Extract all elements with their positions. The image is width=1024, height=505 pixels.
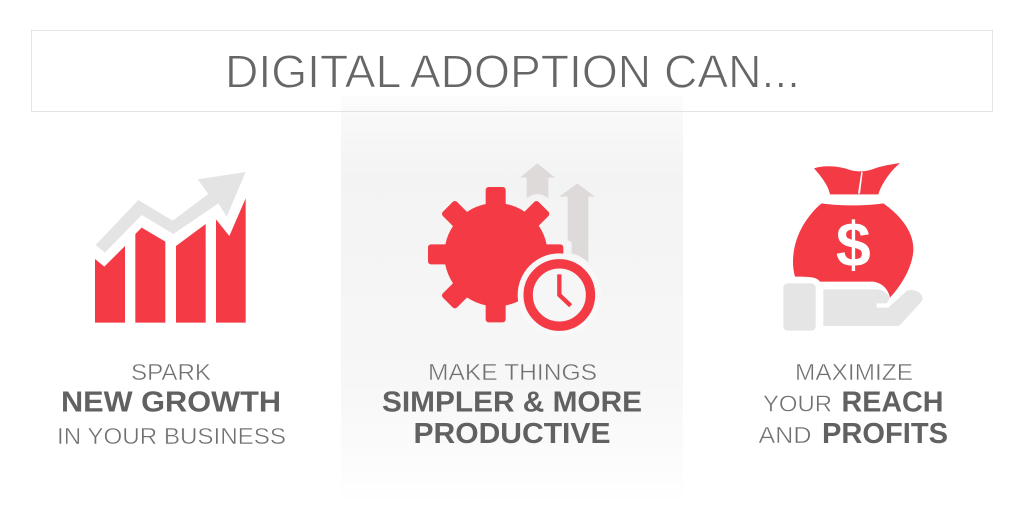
icon: rising bar chart with arrow xyxy=(95,172,246,323)
text: maximize your reach and profits: PROFITS xyxy=(822,418,948,450)
text: spark new growth: SPARK xyxy=(131,359,212,385)
text: maximize your reach and profits xyxy=(758,359,948,450)
icon: gear with clock and arrows xyxy=(428,163,601,337)
icon: money bag on open hand xyxy=(783,163,922,331)
text: make things simpler and more productive: PRODUCTIVE xyxy=(414,418,610,450)
text: maximize your reach and profits: AND xyxy=(758,422,812,448)
text: spark new growth: IN YOUR BUSINESS xyxy=(57,423,286,449)
text: spark new growth xyxy=(57,359,286,449)
text: maximize your reach and profits: REACH xyxy=(842,386,944,418)
text: spark new growth: NEW GROWTH xyxy=(61,386,281,418)
icon: money bag on open hand: $ xyxy=(836,211,871,281)
text: make things simpler and more productive xyxy=(382,359,642,450)
text: make things simpler and more productive: MAKE THINGS xyxy=(428,359,597,385)
text: make things simpler and more productive: SIMPLER & MORE xyxy=(382,386,642,418)
text: maximize your reach and profits: YOUR xyxy=(763,390,832,416)
text: maximize your reach and profits: MAXIMIZE xyxy=(795,359,913,385)
title: DIGITAL ADOPTION CAN... xyxy=(225,46,800,98)
panel: highlighted centre column xyxy=(341,95,683,505)
title box xyxy=(32,30,992,112)
